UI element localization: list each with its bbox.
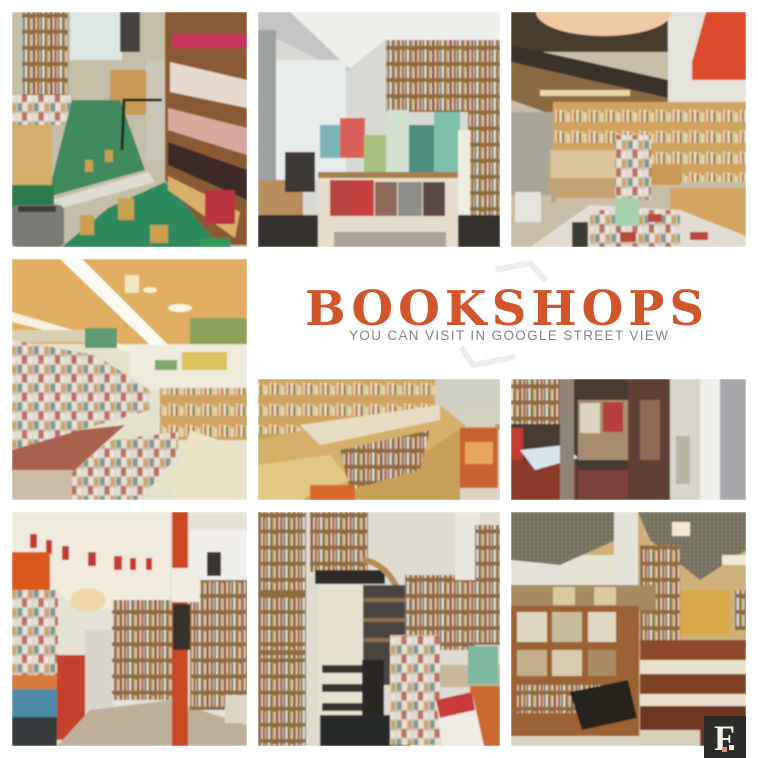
decorative chevron: top	[495, 263, 546, 281]
logo pink dot	[722, 747, 727, 752]
photo: bookshop with perforated ceiling	[511, 512, 746, 746]
logo badge	[704, 716, 746, 758]
photo: bookshop with red pillar	[12, 512, 247, 746]
subtitle: YOU CAN VISIT IN GOOGLE STREET VIEW	[349, 328, 668, 343]
photo: spiral staircase	[258, 512, 500, 746]
heading: BOOKSHOPS	[305, 281, 704, 337]
title block	[305, 263, 704, 365]
logo letter: F	[714, 718, 735, 758]
photo: yellow wooden shelves	[258, 379, 500, 500]
logo white dot	[729, 745, 734, 750]
photo: bookshop with green rabbit carpet	[12, 12, 247, 247]
photo: card and magazine store with long ceiling light	[12, 259, 247, 500]
decorative chevron: bottom	[461, 347, 515, 365]
photo: shop entrance with glass door	[511, 379, 746, 500]
photo: bright bookshop with display table	[258, 12, 500, 247]
photo: mezzanine bookshop with red lamp	[511, 12, 746, 247]
